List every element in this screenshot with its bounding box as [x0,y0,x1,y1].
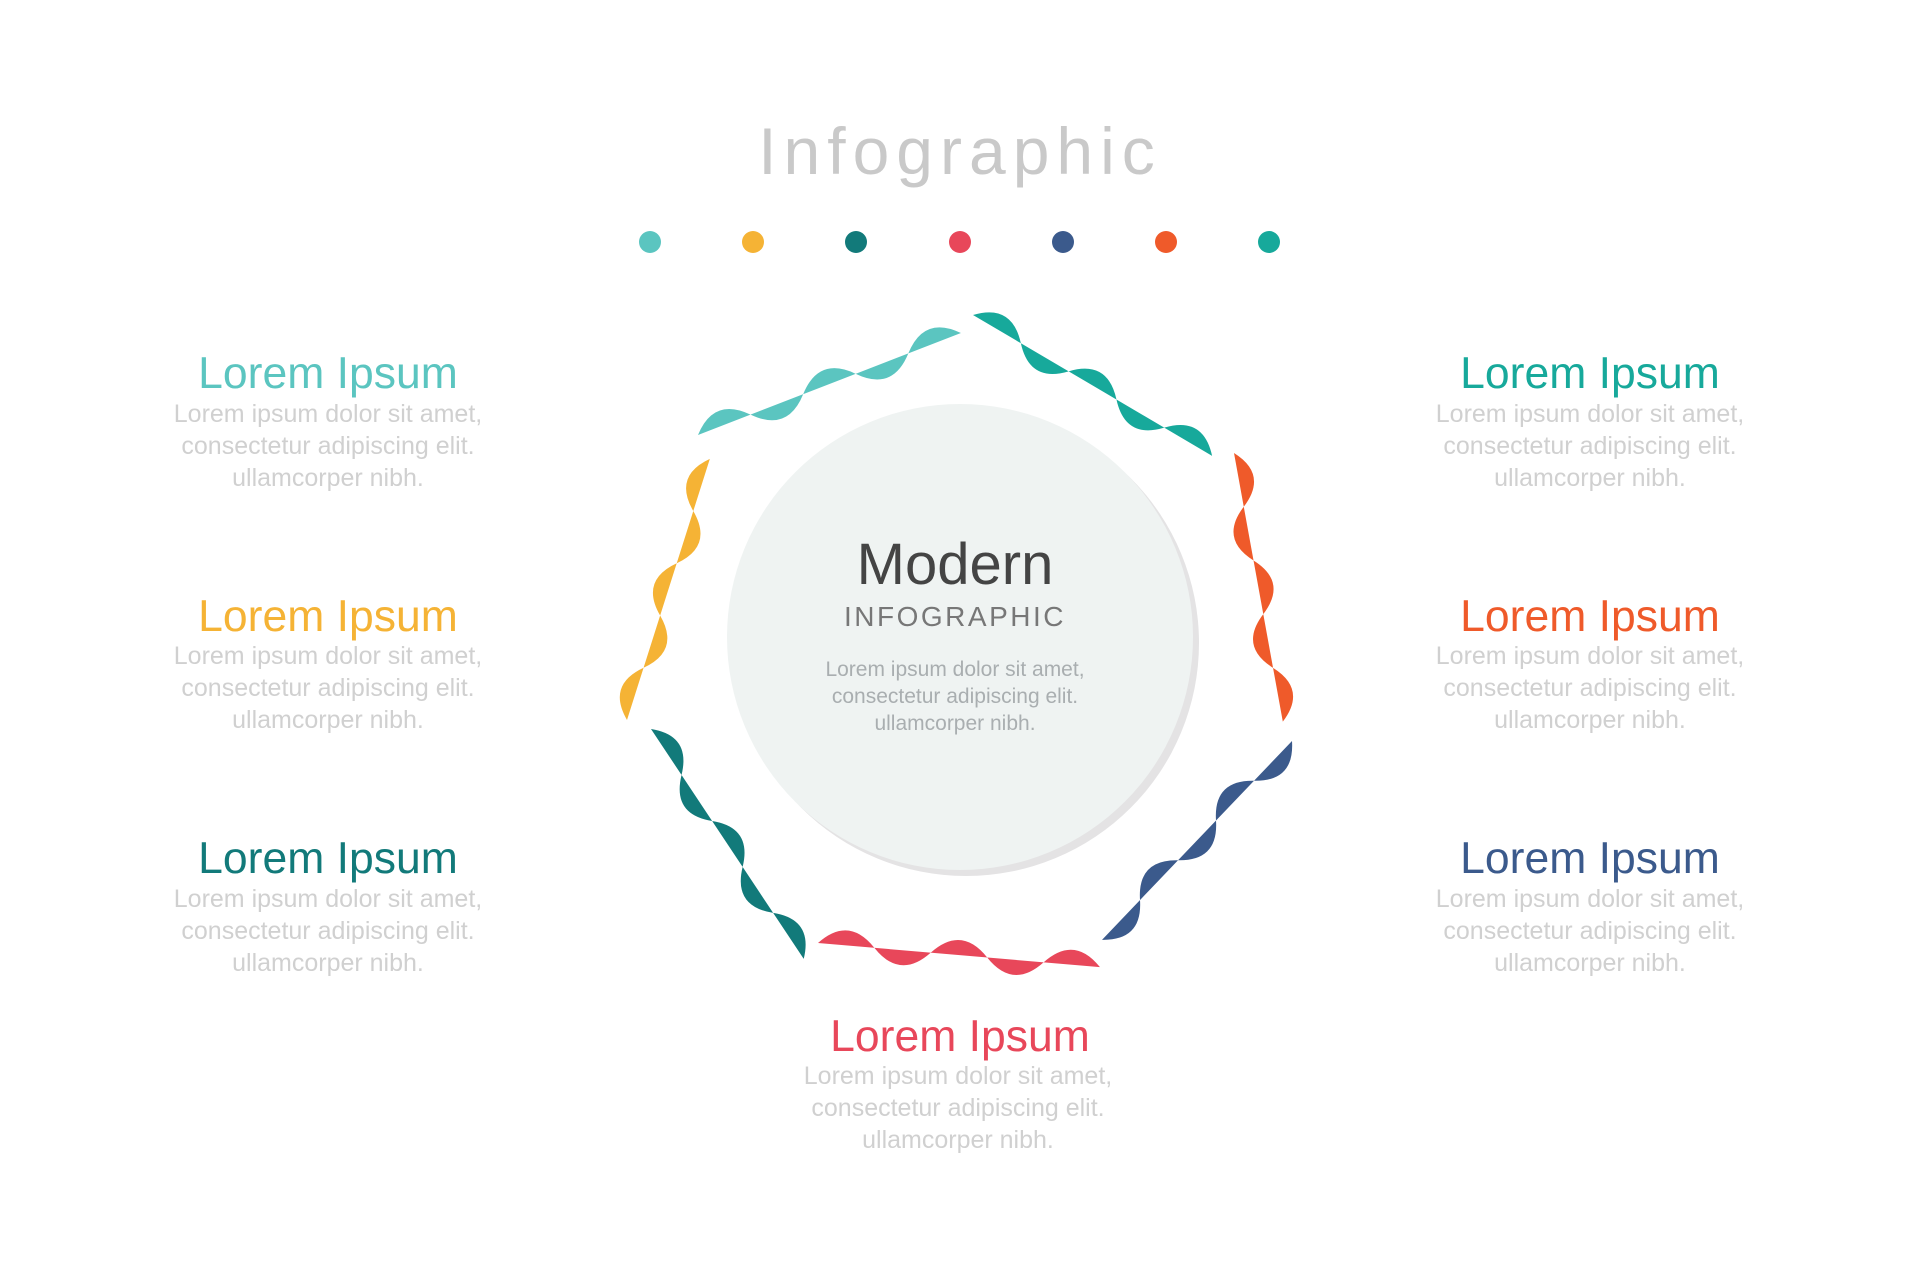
item: right middle: consectetur adipiscing elit. [1443,674,1737,702]
center body text: ullamcorper nibh. [874,712,1036,735]
item: left top: Lorem ipsum dolor sit amet, [174,400,482,428]
color dots row [639,231,1280,253]
item: right top [1436,349,1744,492]
item: bottom center: ullamcorper nibh. [862,1126,1054,1154]
item: right middle: Lorem ipsum dolor sit amet, [1436,642,1744,670]
item: left middle: Lorem ipsum dolor sit amet, [174,642,482,670]
center body text: Lorem ipsum dolor sit amet, [825,658,1085,681]
item: left bottom: Lorem Ipsum [198,834,458,883]
center heading: Modern [857,532,1053,597]
item: left middle: Lorem Ipsum [198,592,458,641]
title: Infographic [758,114,1162,188]
item: right top: consectetur adipiscing elit. [1443,432,1737,460]
item: left top: Lorem Ipsum [198,349,458,398]
item: left bottom: consectetur adipiscing elit. [181,917,475,945]
item: right middle: Lorem Ipsum [1460,592,1720,641]
center circle [727,404,1199,876]
item: left middle: consectetur adipiscing elit. [181,674,475,702]
center subheading: INFOGRAPHIC [844,601,1066,632]
item: left middle: ullamcorper nibh. [232,706,424,734]
item: right bottom: consectetur adipiscing elit. [1443,917,1737,945]
center body text [825,658,1085,735]
item: bottom center: consectetur adipiscing elit. [811,1094,1105,1122]
item: right bottom: Lorem Ipsum [1460,834,1720,883]
item: right middle [1436,592,1744,734]
item: right bottom: ullamcorper nibh. [1494,949,1686,977]
item: left top [174,349,482,492]
item: right top: Lorem ipsum dolor sit amet, [1436,400,1744,428]
item: bottom center: Lorem Ipsum [830,1012,1090,1061]
item: left bottom: Lorem ipsum dolor sit amet, [174,885,482,913]
item: right bottom [1436,834,1744,977]
center body text: consectetur adipiscing elit. [832,685,1078,708]
item: left top: consectetur adipiscing elit. [181,432,475,460]
item: right bottom: Lorem ipsum dolor sit amet, [1436,885,1744,913]
item: left top: ullamcorper nibh. [232,464,424,492]
item: right top: ullamcorper nibh. [1494,464,1686,492]
item: bottom center [804,1012,1112,1154]
item: left middle [174,592,482,734]
item: right middle: ullamcorper nibh. [1494,706,1686,734]
item: bottom center: Lorem ipsum dolor sit amet, [804,1062,1112,1090]
item: left bottom: ullamcorper nibh. [232,949,424,977]
item: right top: Lorem Ipsum [1460,349,1720,398]
item: left bottom [174,834,482,977]
heptagon wave ring [613,302,1303,982]
